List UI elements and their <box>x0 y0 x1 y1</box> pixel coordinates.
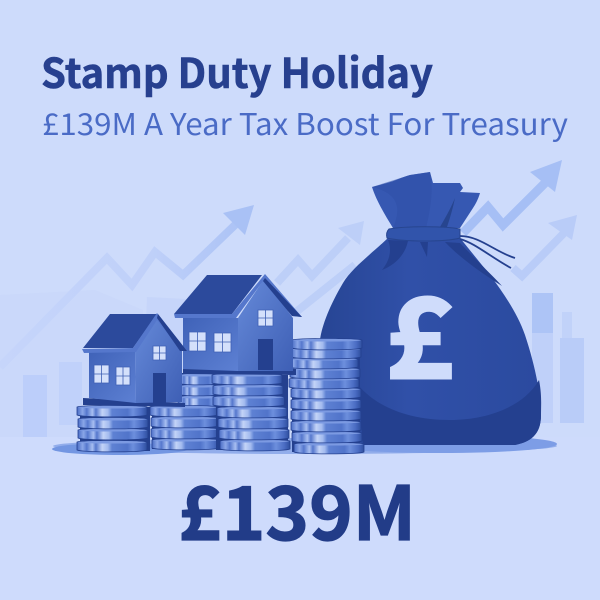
bag neck creases <box>382 240 502 286</box>
background arrow: centre rising trend <box>277 221 364 312</box>
base plate <box>183 368 296 375</box>
right wall <box>135 318 182 403</box>
gable shadow <box>263 278 302 317</box>
door <box>258 339 273 370</box>
background bar chart right <box>532 293 584 423</box>
background floor band <box>0 437 600 600</box>
left wall <box>183 318 238 371</box>
icon: pound sign: £ <box>385 250 455 410</box>
background arrow: left rising trend <box>0 205 254 367</box>
right wall <box>238 279 293 371</box>
eaves <box>174 274 302 318</box>
background arrow: right light trend <box>513 215 577 276</box>
windows <box>189 310 273 352</box>
roof <box>174 275 262 314</box>
windows <box>94 346 166 385</box>
title: Stamp Duty Holiday <box>41 40 433 100</box>
coin stack: under large house <box>212 374 290 451</box>
bag tie strings <box>460 236 515 268</box>
background arrow: right dark trend <box>463 160 562 233</box>
coin stack behind large house <box>178 373 220 407</box>
coin stack: far left <box>77 406 150 452</box>
background faint house silhouettes <box>0 290 186 437</box>
bag lower fold <box>358 380 541 445</box>
headline figure: £139M <box>178 455 416 562</box>
door <box>153 373 166 403</box>
coin stack: tall right <box>288 338 364 454</box>
left wall <box>89 351 136 403</box>
bag tie band <box>387 227 460 241</box>
eaves <box>82 313 187 353</box>
subtitle: £139M A Year Tax Boost For Treasury <box>42 100 568 144</box>
background bar chart left <box>23 362 82 437</box>
bag ruffle crease <box>440 198 455 227</box>
bag top ruffle <box>372 172 480 228</box>
icon: large house <box>174 274 302 375</box>
bag ruffle folds <box>372 172 432 228</box>
coin stack: centre low <box>150 406 220 450</box>
bag body <box>320 238 541 445</box>
gable shadow <box>157 314 187 351</box>
icon: money bag <box>320 172 541 445</box>
roof <box>83 314 157 348</box>
base plate <box>83 398 185 407</box>
icon: small house <box>82 313 187 407</box>
ground shadow <box>52 435 557 455</box>
